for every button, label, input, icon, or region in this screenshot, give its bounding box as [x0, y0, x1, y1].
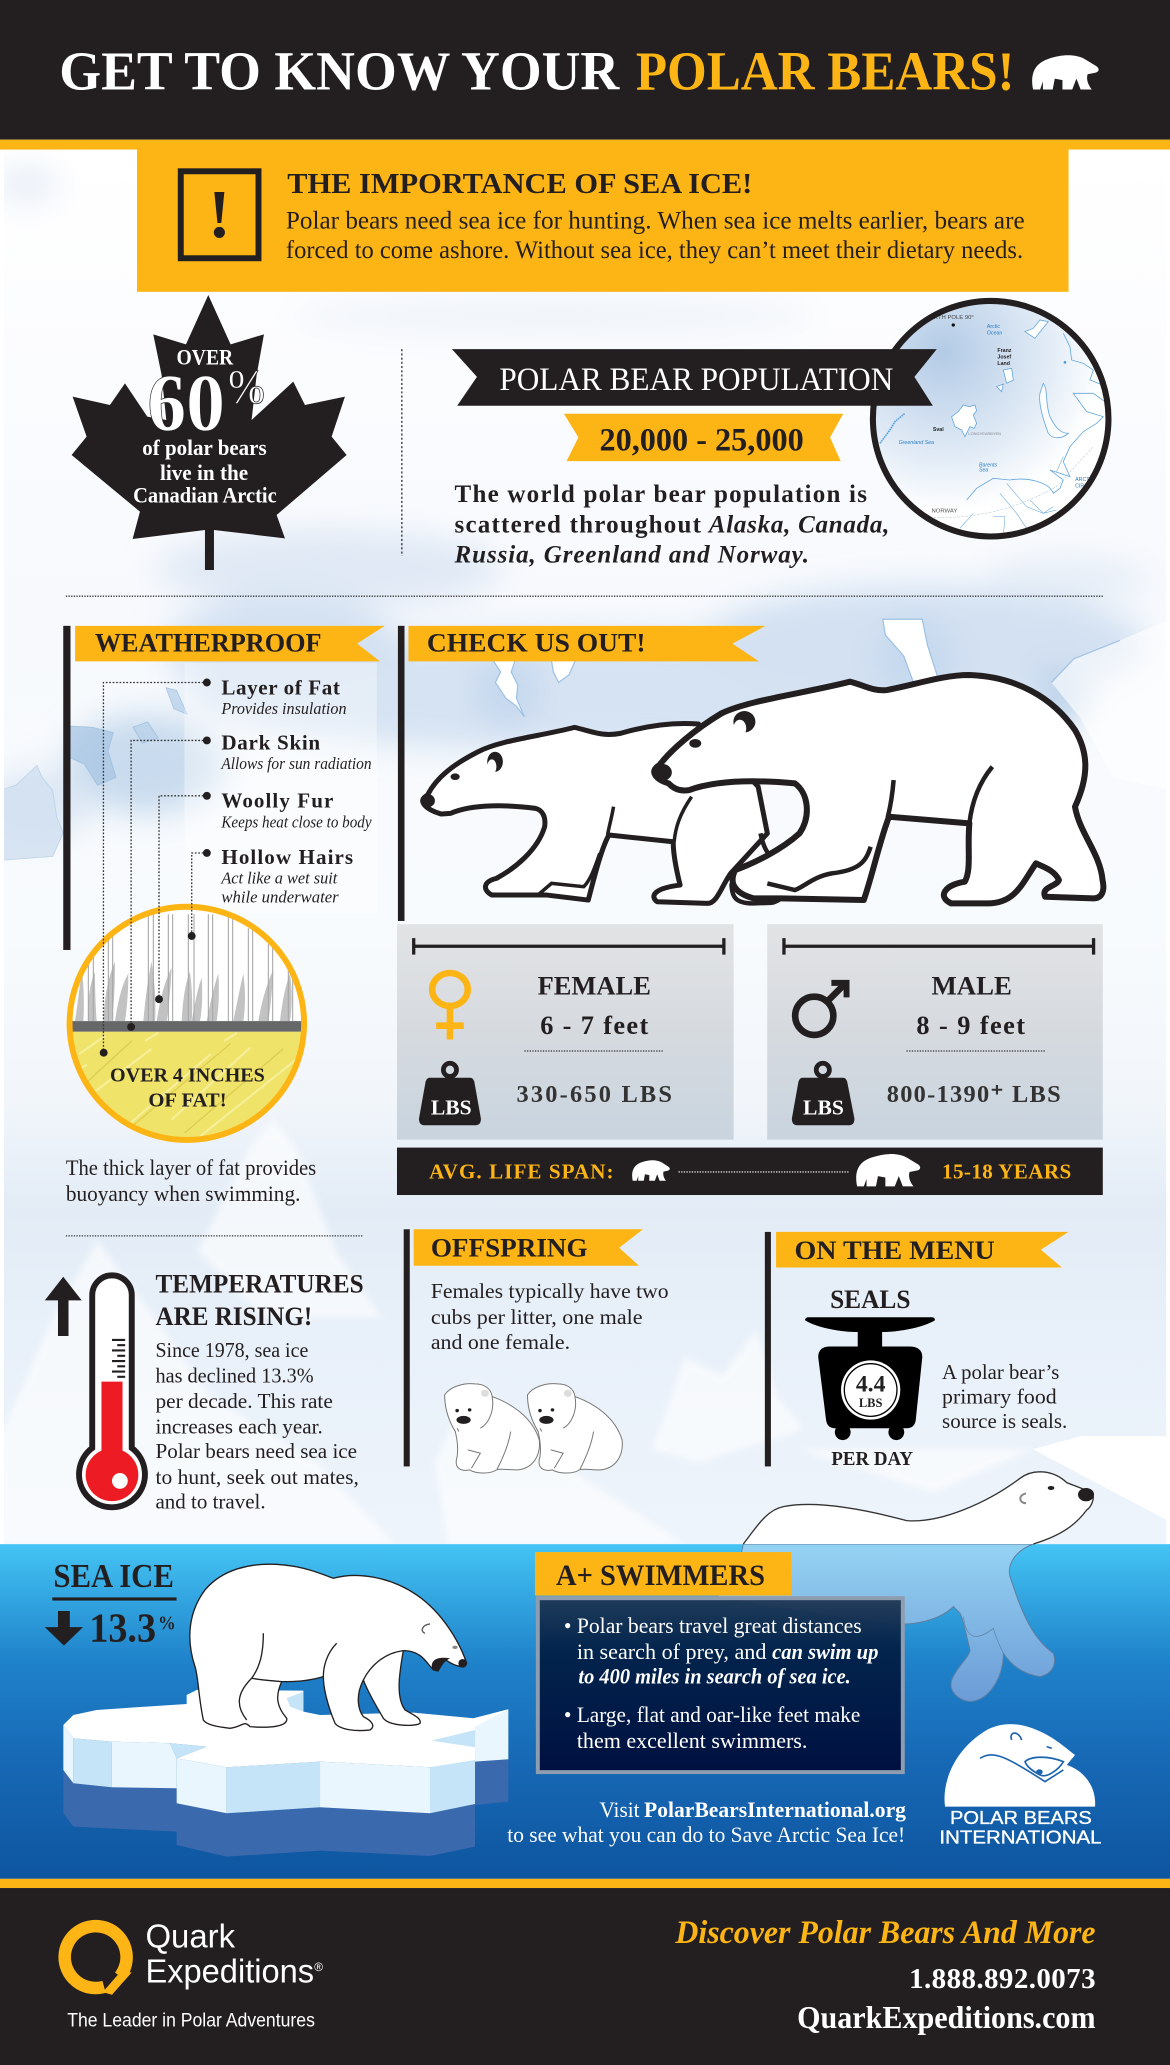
text: offspring body: cubs per litter, one male [431, 1305, 643, 1329]
circle diagram: fur and fat layers [66, 907, 308, 1144]
text: visit polar bears international: to see what you can do to Save Arctic Sea Ice! [507, 1823, 905, 1847]
panel: offspring [404, 1229, 669, 1473]
labels: woolly fur: Woolly Fur [221, 789, 333, 813]
background: arctic map and mountains [0, 150, 1170, 1547]
icon: scale 4.4 lbs: LBS [859, 1396, 883, 1410]
banner: on the menu [776, 1232, 1069, 1267]
illustration: female and male bears [420, 675, 1103, 903]
text: swimmer facts: • [564, 1614, 572, 1638]
heading: sea ice stat: SEA ICE [53, 1557, 174, 1595]
text: offspring body: Females typically have two [431, 1279, 669, 1303]
labels: woolly fur: Keeps heat close to body [220, 812, 372, 831]
icon: weight lbs [792, 1063, 854, 1125]
map circle: north pole: ARCTIC [930, 302, 950, 308]
leader lines: fur labels [100, 679, 211, 1057]
heading: importance of sea ice: THE IMPORTANCE OF SEA ICE! [287, 169, 752, 200]
map circle: north pole: Josef [997, 354, 1011, 360]
bear: male [653, 675, 1103, 903]
text: temperature body: and to travel. [155, 1490, 266, 1514]
icon: scale 4.4 lbs [805, 1317, 935, 1440]
map circle: north pole: Land [997, 361, 1010, 367]
map circle: north pole: Arctic [987, 324, 1000, 330]
text: temperature body: has declined 13.3% [155, 1364, 314, 1388]
heading: temperatures are rising: TEMPERATURES [155, 1270, 364, 1299]
ribbon: polar bear population [452, 349, 937, 406]
map circle: north pole: Franz [997, 348, 1012, 354]
maple leaf: 60 percent callout: % [228, 360, 265, 414]
maple leaf: 60 percent callout: 60 [147, 357, 225, 448]
text: offspring body: and one female. [431, 1330, 570, 1354]
banner: weatherproof: WEATHERPROOF [95, 629, 321, 658]
footer band [0, 1879, 1170, 2065]
text: fat caption: buoyancy when swimming. [66, 1182, 300, 1206]
panel: male stats [767, 924, 1103, 1140]
text: swimmer facts: to 400 miles in search of sea ice. [578, 1664, 851, 1688]
map circle: north pole: Barents [979, 462, 997, 468]
panel: temperatures are rising [45, 1270, 364, 1514]
text: female: FEMALE [538, 972, 651, 1001]
labels: layer of fat: Provides insulation [220, 699, 347, 718]
text: menu body: primary food [942, 1385, 1057, 1409]
text: over 4 inches of fat: OF FAT! [148, 1090, 227, 1112]
text: menu body: A polar bear’s [942, 1360, 1059, 1384]
map circle: north pole [873, 301, 1108, 537]
maple leaf: 60 percent callout: OVER [177, 344, 234, 369]
maple leaf: 60 percent callout: live in the [160, 460, 248, 485]
maple leaf: 60 percent callout: of polar bears [142, 435, 267, 460]
text: population description: scattered throughout [455, 511, 702, 538]
text: over 4 inches of fat [110, 1064, 265, 1112]
text: visit polar bears international: PolarBearsInternational.org [644, 1798, 906, 1822]
heading: temperatures are rising [155, 1270, 364, 1331]
labels: hollow hairs [220, 845, 353, 907]
iceberg [63, 1690, 508, 1813]
icon: warning box: ! [208, 176, 231, 252]
map circle: north pole: CIRCLE [1075, 483, 1095, 489]
maple leaf: 60 percent callout: Canadian Arctic [133, 482, 277, 507]
banner: on the menu: ON THE MENU [794, 1236, 995, 1265]
bear on iceberg [190, 1564, 467, 1731]
text: male: MALE [932, 972, 1012, 1001]
header band [0, 0, 1170, 150]
text: visit polar bears international: Visit [599, 1798, 640, 1822]
heading: sea ice stat: 13.3 [89, 1606, 156, 1651]
text box [538, 1598, 903, 1772]
map circle: north pole: Sea [979, 468, 988, 474]
logo: quark expeditions: ® [314, 1960, 323, 1974]
water [0, 1544, 1170, 1879]
heading: sea ice stat [45, 1557, 177, 1651]
icon: up arrow [45, 1277, 82, 1336]
panel: average life span: 15-18 YEARS [942, 1160, 1071, 1184]
icon: female symbol [432, 973, 468, 1040]
text: menu body [942, 1360, 1067, 1433]
panel: female stats [397, 924, 734, 1140]
logo: quark expeditions: Expeditions [145, 1952, 314, 1989]
illustration: iceberg reflection [63, 1564, 508, 1857]
icon: male symbol [795, 983, 847, 1035]
logo: polar bears international [939, 1724, 1101, 1847]
map circle: north pole: Sval [933, 427, 944, 433]
text: discover tagline: Discover Polar Bears And More [674, 1915, 1096, 1951]
icon: scale 4.4 lbs: 4.4 [856, 1371, 886, 1397]
text: male weight: 800-1390⁺ LBS [887, 1081, 1061, 1108]
text: temperature body: Polar bears need sea ice [155, 1439, 357, 1463]
banner: offspring: OFFSPRING [431, 1234, 588, 1263]
icon: warning box [181, 171, 259, 258]
text: per day: PER DAY [831, 1448, 913, 1470]
panel: on the menu [765, 1232, 1069, 1470]
text: phone: 1.888.892.0073 [909, 1963, 1096, 1995]
icon: down arrow [45, 1611, 83, 1646]
title: GET TO KNOW YOUR [59, 41, 620, 102]
text: swimmer facts: in search of prey, and [577, 1640, 767, 1664]
title [59, 41, 1015, 102]
icon: weight lbs: LBS [431, 1096, 472, 1120]
text: sea ice body: Polar bears need sea ice for hunting. When sea ice melts earlier, bears are [286, 205, 1025, 234]
banner: A+ swimmers: A+ SWIMMERS [556, 1560, 765, 1592]
icon: small bear [632, 1160, 670, 1181]
icon: weight lbs [419, 1063, 481, 1125]
panel: check us out [398, 626, 1103, 921]
icon: thermometer [79, 1275, 145, 1507]
labels: layer of fat: Layer of Fat [221, 675, 340, 699]
ribbon: population number [564, 414, 843, 461]
text: swimmer facts: them excellent swimmers. [577, 1729, 807, 1753]
labels: hollow hairs: while underwater [221, 888, 339, 907]
icon: weight lbs: LBS [803, 1096, 844, 1120]
text: temperature body: per decade. This rate [155, 1389, 333, 1413]
text: menu body: source is seals. [942, 1409, 1067, 1433]
text: swimmer facts: Large, flat and oar-like feet make [577, 1703, 860, 1727]
panel: A+ swimmers [535, 1552, 903, 1772]
banner: check us out: CHECK US OUT! [427, 629, 646, 658]
maple leaf: 60 percent callout [72, 295, 347, 570]
labels: dark skin [220, 730, 372, 773]
ribbon: polar bear population: POLAR BEAR POPULATION [499, 362, 894, 398]
bear: female [420, 723, 767, 903]
logo: polar bears international: INTERNATIONAL [939, 1826, 1101, 1847]
text: swimmer facts: Polar bears travel great distances [577, 1614, 862, 1638]
panel: weatherproof [63, 626, 385, 1206]
icon: polar bear cubs [445, 1384, 622, 1473]
text: swimmer facts: • [564, 1703, 572, 1727]
ribbon: population number: 20,000 - 25,000 [599, 423, 804, 459]
map circle: north pole: NORTH POLE 90° [925, 315, 974, 321]
logo: polar bears international: POLAR BEARS [950, 1807, 1092, 1828]
text: temperature body [155, 1338, 359, 1514]
text: population description: Russia, Greenland and Norway. [454, 542, 809, 569]
text: male height: 8 - 9 feet [916, 1011, 1025, 1040]
text: over 4 inches of fat: OVER 4 INCHES [110, 1064, 265, 1086]
text: sea ice body [286, 205, 1025, 264]
icon: header bear [1032, 55, 1099, 90]
labels: layer of fat [220, 675, 347, 718]
text: population description [454, 481, 889, 569]
banner: weatherproof [75, 626, 385, 661]
labels: hollow hairs: Act like a wet suit [220, 868, 338, 887]
map circle: north pole: Greenland Sea [899, 440, 934, 446]
labels: hollow hairs: Hollow Hairs [221, 845, 353, 869]
panel: average life span [397, 1148, 1103, 1195]
text: female height: 6 - 7 feet [540, 1011, 648, 1040]
banner: offspring [414, 1229, 643, 1266]
text: population description: The world polar bear population is [455, 481, 867, 508]
illustration: swimming bear [717, 1472, 1094, 1702]
text: swimmer facts [564, 1614, 879, 1753]
text: sea ice body: forced to come ashore. Without sea ice, they can’t meet their dietary needs. [286, 235, 1023, 264]
labels: woolly fur [220, 789, 372, 831]
map circle: north pole: Ocean [987, 331, 1002, 337]
text: offspring body [431, 1279, 669, 1354]
text: temperature body: increases each year. [155, 1414, 323, 1438]
logo: quark expeditions: Quark [145, 1917, 236, 1954]
text: seals: SEALS [830, 1285, 910, 1314]
text: female weight: 330-650 LBS [516, 1081, 672, 1108]
map circle: north pole: ARCTIC [1075, 477, 1095, 483]
text: population description: Alaska, Canada, [707, 511, 889, 538]
labels: dark skin: Dark Skin [221, 730, 320, 754]
banner: A+ swimmers [535, 1552, 791, 1596]
text: fat caption [66, 1156, 316, 1206]
map circle: north pole: NORWAY [932, 509, 957, 515]
heading: temperatures are rising: ARE RISING! [155, 1302, 312, 1331]
logo: quark expeditions: The Leader in Polar Adventures [67, 2009, 315, 2031]
text: fat caption: The thick layer of fat provides [66, 1156, 316, 1180]
panel: average life span: AVG. LIFE SPAN: [429, 1160, 614, 1184]
labels: dark skin: Allows for sun radiation [220, 754, 372, 773]
icon: large bear [856, 1154, 920, 1186]
banner: check us out [408, 626, 766, 661]
icon: height bar [414, 938, 724, 955]
map circle: north pole: LONGYEARBYEN [968, 431, 1001, 436]
title: POLAR BEARS! [636, 41, 1015, 102]
text: temperature body: to hunt, seek out mates, [155, 1465, 359, 1489]
heading: sea ice stat: % [158, 1612, 176, 1634]
text: temperature body: Since 1978, sea ice [155, 1338, 308, 1362]
text: website: QuarkExpeditions.com [797, 2000, 1096, 2035]
icon: height bar [784, 938, 1094, 955]
text: swimmer facts: can swim up [772, 1640, 879, 1664]
panel: importance of sea ice [137, 149, 1069, 292]
logo: quark expeditions [65, 1917, 323, 2031]
text: visit polar bears international [507, 1798, 906, 1847]
